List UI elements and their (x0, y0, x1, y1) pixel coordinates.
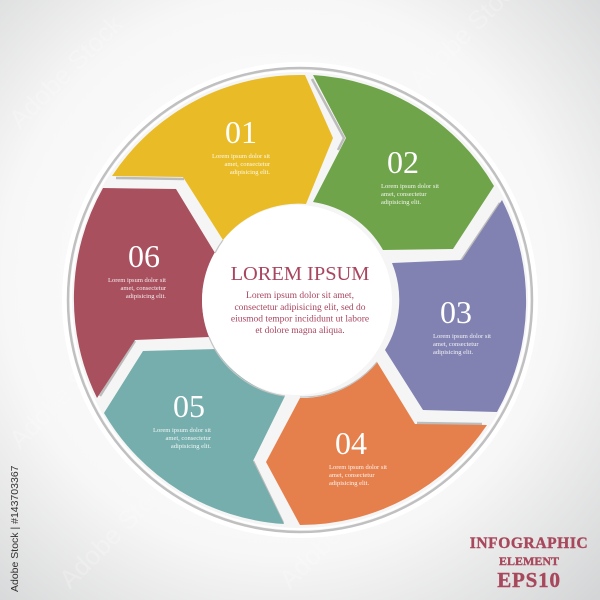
footer label: ELEMENT (499, 554, 559, 568)
text 04: Lorem ipsum dolor sit (329, 464, 387, 471)
watermark: Adobe Stock (53, 468, 179, 594)
footer label: INFOGRAPHIC (470, 535, 588, 552)
number 05: 05 (173, 388, 205, 424)
segment 05: teal (104, 349, 285, 524)
watermark: Adobe Stock (3, 8, 129, 134)
text 06: adipisicing elit. (126, 293, 166, 300)
center text: et dolore magna aliqua. (255, 326, 345, 336)
number 02: 02 (387, 144, 419, 180)
number 03: 03 (440, 294, 472, 330)
footer label: EPS10 (497, 568, 561, 592)
text 05: amet, consectetur (166, 435, 212, 442)
text 02: amet, consectetur (381, 191, 427, 198)
text 03: adipisicing elit. (433, 349, 473, 356)
footer label (470, 535, 588, 592)
text 03: amet, consectetur (433, 341, 479, 348)
number 04: 04 (335, 425, 367, 461)
text 01: amet, consectetur (225, 161, 271, 168)
text 02: Lorem ipsum dolor sit (381, 183, 439, 190)
stock id: Adobe Stock | #143703367 (9, 465, 21, 592)
watermark: Adobe Stock (3, 328, 129, 454)
segment 04: orange (266, 362, 487, 525)
segment shadows (100, 79, 500, 523)
segment 03: purple (385, 200, 526, 412)
text 05: adipisicing elit. (171, 443, 211, 450)
text 02: adipisicing elit. (381, 199, 421, 206)
number 06: 06 (128, 238, 160, 274)
number 01: 01 (225, 114, 257, 150)
watermark: Adobe Stock (273, 468, 399, 594)
segment 06: crimson (74, 188, 215, 398)
text 01: Lorem ipsum dolor sit (212, 153, 270, 160)
segment 01: yellow (112, 75, 333, 240)
center text: eiusmod tempor incididunt ut labore (231, 314, 369, 324)
text 01: adipisicing elit. (230, 169, 270, 176)
text 06: Lorem ipsum dolor sit (108, 277, 166, 284)
center text: consectetur adipisicing elit, sed do (234, 303, 366, 313)
text 04: amet, consectetur (329, 472, 375, 479)
text 05: Lorem ipsum dolor sit (153, 427, 211, 434)
center circle (202, 205, 392, 397)
outer ring (62, 62, 538, 538)
text 06: amet, consectetur (121, 285, 167, 292)
text 04: adipisicing elit. (329, 480, 369, 487)
center title: LOREM IPSUM (231, 263, 369, 285)
center text: Lorem ipsum dolor sit amet, (246, 291, 354, 301)
text 03: Lorem ipsum dolor sit (433, 333, 491, 340)
segment 02: green (313, 75, 494, 250)
